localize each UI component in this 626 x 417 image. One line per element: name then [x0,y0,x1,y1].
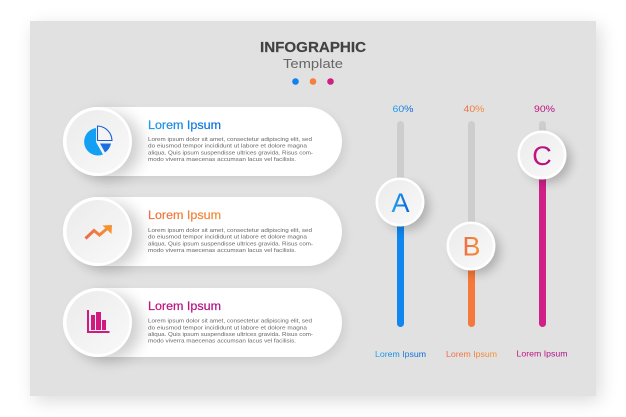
body text: Lorem ipsum dolor sit amet, consectetur adipiscing elit, sed [148,319,312,325]
body text: aliqua. Quis ipsum suspendisse ultrices gravida. Risus com- [148,332,313,338]
decorative colour dots [292,78,334,85]
percentage: 60% [392,104,414,115]
slider B: B [462,232,481,262]
body text: modo viverra maecenas accumsan lacus vel facilisis. [148,339,296,345]
slider C [516,104,571,358]
label: Lorem Ipsum [516,348,568,358]
slider C: C [532,141,552,171]
body text: do eiusmod tempor incididunt ut labore et dolore magna [148,325,308,331]
percentage: 40% [464,104,485,115]
panel: item 1 [63,107,345,180]
percentage: 90% [534,104,556,115]
slider A: A [391,188,410,218]
subtitle: Template [283,56,343,71]
body text [148,319,313,345]
panel: item 3 [63,288,345,361]
label: Lorem Ipsum [375,349,426,359]
body text: do eiusmod tempor incididunt ut labore et dolore magna [148,144,308,150]
body text: modo viverra maecenas accumsan lacus vel facilisis. [148,248,296,254]
heading: Lorem Ipsum [148,299,221,313]
body text: modo viverra maecenas accumsan lacus vel facilisis. [148,157,296,163]
body text [148,228,313,254]
heading: Lorem Ipsum [148,208,221,222]
body text: aliqua. Quis ipsum suspendisse ultrices gravida. Risus com- [148,150,313,156]
body text [148,137,313,163]
title: INFOGRAPHIC [260,40,367,56]
label: Lorem Ipsum [446,349,497,359]
slider A [375,104,429,359]
panel: item 2 [63,197,345,270]
body text: Lorem ipsum dolor sit amet, consectetur adipiscing elit, sed [148,228,312,234]
heading: Lorem Ipsum [148,118,221,132]
icon: pie chart [84,126,112,155]
icon: bar chart [87,310,110,333]
slider B [446,104,500,359]
icon: trend arrow [86,225,112,238]
body text: do eiusmod tempor incididunt ut labore et dolore magna [148,235,308,241]
body text: aliqua. Quis ipsum suspendisse ultrices gravida. Risus com- [148,241,313,247]
body text: Lorem ipsum dolor sit amet, consectetur adipiscing elit, sed [148,137,312,143]
